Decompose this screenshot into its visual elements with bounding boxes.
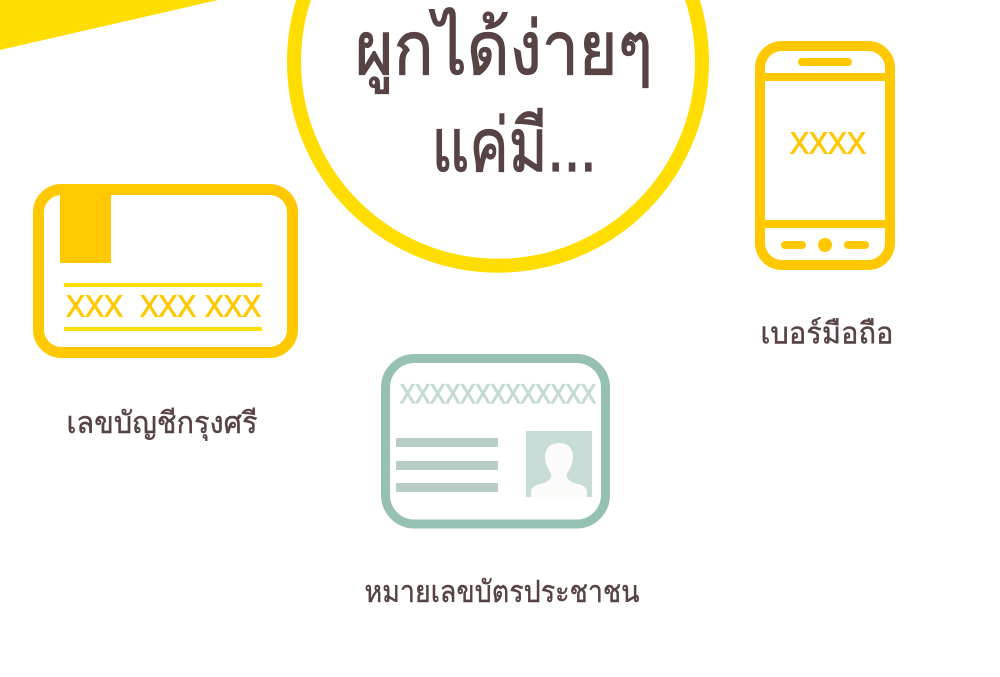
bank book icon: XXX (66, 288, 123, 324)
label: mobile number: เบอร์มือถือ (760, 316, 894, 350)
phone icon: XXXX (790, 126, 866, 160)
label: bank account: เลขบัญชีกรุงศรี (66, 407, 258, 442)
ID card icon (386, 358, 606, 524)
title text (355, 7, 653, 187)
title text: แค่มี... (432, 104, 596, 187)
ID card icon: XXXXXXXXXXXXX (400, 379, 596, 409)
bank book icon: XXX (205, 288, 261, 324)
label: national ID number: หมายเลขบัตรประชาชน (364, 576, 640, 609)
title circle (294, 0, 702, 266)
title text: ผูกได้ง่ายๆ (355, 7, 653, 94)
corner accent: yellow wedge (0, 0, 218, 50)
bank book icon (38, 190, 292, 352)
phone icon (760, 46, 890, 265)
bank book icon: XXX (140, 288, 196, 324)
